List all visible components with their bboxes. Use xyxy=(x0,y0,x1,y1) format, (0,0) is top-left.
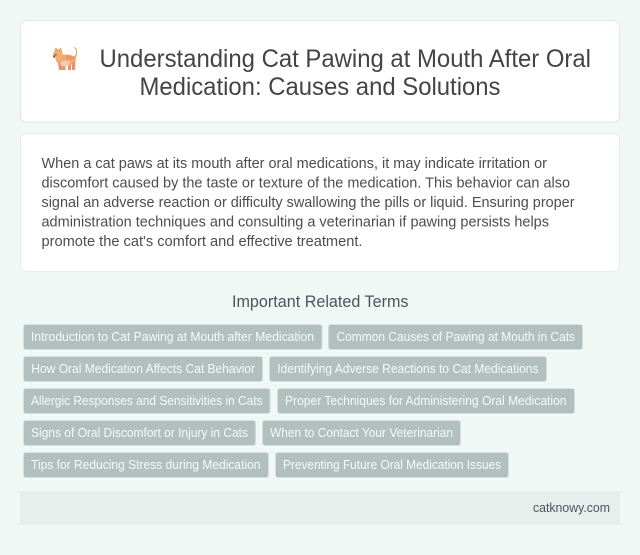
chip: Preventing Future Oral Medication Issues xyxy=(283,458,501,472)
chip: Tips for Reducing Stress during Medication xyxy=(31,458,261,472)
chip: How Oral Medication Affects Cat Behavior xyxy=(31,362,255,376)
description text xyxy=(42,155,574,250)
panel: description card xyxy=(20,134,620,272)
chip: Introduction to Cat Pawing at Mouth after Medication xyxy=(31,330,314,344)
chip xyxy=(24,324,322,350)
footer xyxy=(20,491,620,525)
chip xyxy=(328,324,582,350)
description text: signal an adverse reaction or difficulty swallowing the pills or liquid. Ensuring proper xyxy=(42,194,574,211)
title text xyxy=(100,45,591,101)
panel: related term chips xyxy=(24,324,582,478)
description text: discomfort caused by the taste or texture of the medication. This behavior can also xyxy=(42,174,570,192)
footer site name: catknowy.com xyxy=(533,500,610,515)
chip xyxy=(24,388,270,414)
description text: promote the cat's comfort and effective treatment. xyxy=(42,233,362,250)
chip xyxy=(278,388,574,414)
chip: Identifying Adverse Reactions to Cat Medications xyxy=(277,362,538,376)
chip xyxy=(24,420,256,446)
chip xyxy=(276,452,508,478)
panel: title card xyxy=(20,20,620,122)
description text: When a cat paws at its mouth after oral medications, it may indicate irritation or xyxy=(42,155,547,172)
chip: When to Contact Your Veterinarian xyxy=(270,426,453,440)
title text: Understanding Cat Pawing at Mouth After Oral xyxy=(100,45,591,73)
title text: Medication: Causes and Solutions xyxy=(140,73,500,101)
description text: administration techniques and consulting a veterinarian if pawing persists helps xyxy=(42,214,549,230)
chip: Proper Techniques for Administering Oral Medication xyxy=(285,394,567,408)
chip xyxy=(24,452,268,478)
chip: Signs of Oral Discomfort or Injury in Cats xyxy=(31,426,248,440)
heading: important related terms: Important Related Terms xyxy=(232,293,408,311)
chip xyxy=(24,356,262,382)
chip xyxy=(270,356,546,382)
chip xyxy=(262,420,460,446)
chip: Common Causes of Pawing at Mouth in Cats xyxy=(336,330,575,344)
icon: cat xyxy=(53,47,77,70)
chip: Allergic Responses and Sensitivities in Cats xyxy=(31,394,262,408)
